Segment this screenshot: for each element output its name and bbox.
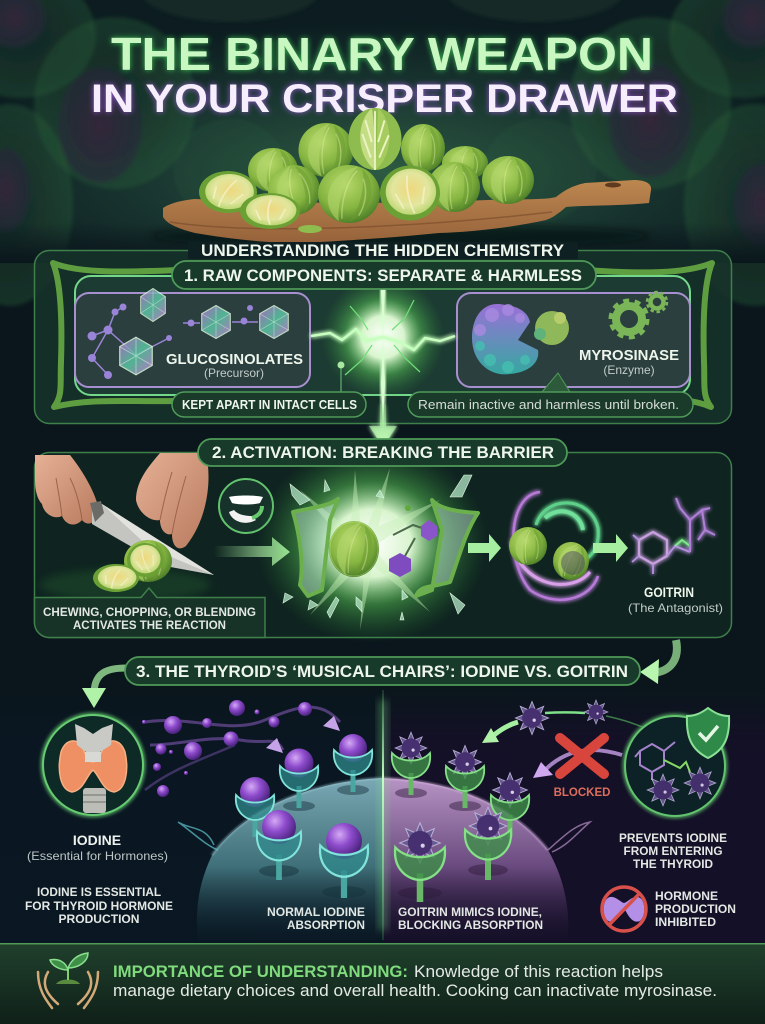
text: prevents iodine [619, 831, 727, 871]
text: iodine essential [25, 885, 173, 926]
cell wall [53, 263, 712, 407]
heading 1 [172, 261, 596, 289]
title: THE BINARY WEAPON [111, 28, 653, 80]
text: importance: Knowledge of this reaction helps [414, 963, 663, 981]
connector: right pointer [542, 373, 570, 392]
label: goitrin: GOITRIN [644, 584, 694, 600]
label: precursor: (Precursor) [204, 366, 264, 380]
label: the antagonist: (The Antagonist) [628, 601, 723, 615]
subtitle: UNDERSTANDING THE HIDDEN CHEMISTRY [201, 241, 565, 260]
icon: chewing mouth [219, 479, 273, 533]
text: prevents iodine: FROM ENTERING [624, 844, 722, 858]
blocked arrow [533, 750, 622, 778]
footer banner [0, 943, 765, 1024]
text: iodine essential: IODINE IS ESSENTIAL [37, 885, 161, 899]
arrow: heading 3 to thyroid [82, 668, 126, 708]
enzyme [472, 304, 569, 374]
text: normal absorption [267, 905, 365, 932]
text: prevents iodine: THE THYROID [633, 857, 713, 871]
icon: shield [687, 708, 729, 758]
pill: kept apart: KEPT APART IN INTACT CELLS [182, 398, 357, 412]
panel 2: activation [34, 439, 731, 643]
receptors with goitrin [392, 732, 529, 902]
glucosinolates box [75, 288, 310, 387]
red X [560, 738, 604, 774]
label: blocked: BLOCKED [554, 787, 610, 799]
iodine labels: (Essential for Hormones) [27, 849, 168, 863]
energy spark [311, 275, 455, 430]
arrow: to explosion [214, 537, 290, 566]
caption: chewing [34, 588, 265, 638]
arrow: panel 1 to panel 2 [369, 404, 397, 447]
cell surface dome [178, 778, 590, 940]
label: glucosinolates: GLUCOSINOLATES [166, 351, 303, 368]
explosion [257, 443, 487, 643]
heading 3 [125, 657, 640, 685]
text: importance [113, 963, 717, 1000]
pill: remain inactive [408, 392, 693, 417]
heading 3: 3. THE THYROID’S ‘MUSICAL CHAIRS’: IODINE VS. GOITRIN [136, 663, 628, 681]
label: myrosinase: MYROSINASE [579, 347, 679, 364]
goitrin molecule [632, 498, 715, 574]
text: importance: manage dietary choices and overall health. Cooking can inactivate myrosinase. [113, 982, 717, 1000]
text: goitrin mimics [398, 905, 543, 932]
text: normal absorption: ABSORPTION [287, 918, 365, 932]
connector: left dot [338, 362, 344, 392]
pill: remain inactive: Remain inactive and harmless until broken. [418, 398, 679, 412]
heading 2 [198, 439, 567, 466]
iodine stream [142, 700, 340, 797]
text: hormone inhibited: INHIBITED [655, 915, 716, 929]
panel 1: raw components [34, 250, 732, 430]
goitrin shield circle [625, 708, 729, 816]
text: iodine essential: PRODUCTION [58, 912, 140, 926]
gears [610, 292, 667, 338]
arrow: to goitrin [593, 534, 628, 562]
glowing divider [378, 690, 388, 940]
icon: hormone production prohibited [602, 887, 646, 931]
hands and knife [35, 453, 214, 601]
text: iodine essential: FOR THYROID HORMONE [25, 899, 173, 913]
text: goitrin mimics: GOITRIN MIMICS IODINE, [398, 905, 542, 919]
arrow: to swirl [468, 534, 501, 562]
title: IN YOUR CRISPER DRAWER [91, 77, 678, 121]
icon: hands and sprout [38, 953, 98, 1008]
iodine labels [27, 832, 168, 863]
swirl reaction [509, 492, 598, 600]
text: goitrin mimics: BLOCKING ABSORPTION [398, 918, 543, 932]
background: plant cells header [0, 0, 765, 305]
section 3 background tint [0, 690, 765, 943]
label: enzyme: (Enzyme) [603, 363, 655, 377]
caption: chewing: CHEWING, CHOPPING, OR BLENDING [43, 605, 256, 619]
caption: chewing: ACTIVATES THE REACTION [73, 618, 226, 632]
title [91, 28, 678, 121]
thyroid icon [43, 715, 143, 815]
free goitrin and green arrow [482, 700, 650, 743]
iodine labels: IODINE [73, 832, 121, 848]
arrow: goitrin down to heading 3 [640, 640, 677, 684]
heading 1: 1. RAW COMPONENTS: SEPARATE & HARMLESS [184, 266, 582, 285]
receptors with iodine [236, 734, 372, 898]
text: normal absorption: NORMAL IODINE [267, 905, 365, 919]
text: hormone inhibited [655, 889, 736, 929]
molecules [88, 288, 288, 379]
text: hormone inhibited: HORMONE [655, 889, 718, 903]
illustration: brussels sprouts on cutting board [150, 108, 651, 247]
text: hormone inhibited: PRODUCTION [655, 902, 736, 916]
inner membrane [75, 276, 690, 395]
myrosinase box [457, 292, 690, 387]
pill: kept apart [172, 392, 366, 417]
text: prevents iodine: PREVENTS IODINE [619, 831, 727, 845]
heading 2: 2. ACTIVATION: BREAKING THE BARRIER [212, 443, 554, 462]
text: importance: IMPORTANCE OF UNDERSTANDING: [113, 963, 408, 981]
